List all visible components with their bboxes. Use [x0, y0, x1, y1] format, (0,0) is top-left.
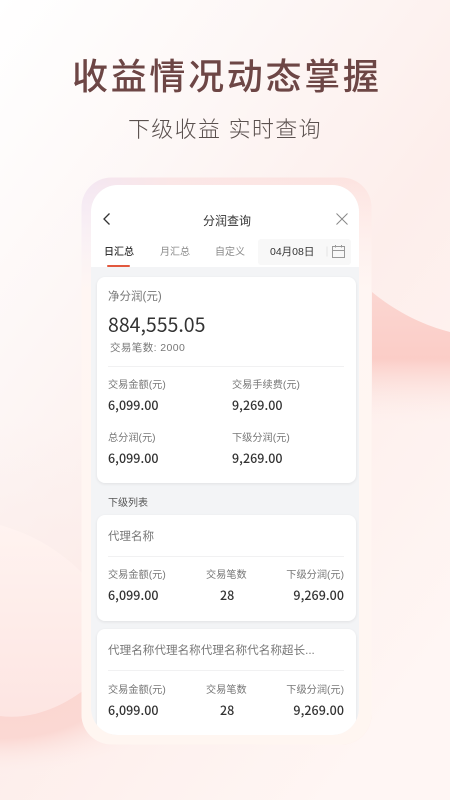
column: sub-agent profit: 下级分润(元) [286, 570, 344, 580]
icon: calendar [326, 245, 345, 258]
icon: close [336, 213, 348, 225]
column: amount: 交易金额(元) [108, 570, 166, 580]
metric: fee: 交易手续费(元) [232, 380, 300, 390]
agent card 1 [97, 515, 356, 621]
column: count: 交易笔数 [206, 684, 247, 696]
tab: monthly: 月汇总 [160, 247, 190, 258]
column: sub-agent profit: 9,269.00 [293, 585, 344, 604]
metric: sub-agent profit: 9,269.00 [232, 448, 283, 467]
net profit label: 净分润(元) [108, 291, 162, 303]
phone screen [91, 185, 359, 735]
metric: sub-agent profit [232, 432, 290, 467]
metric: sub-agent profit: 下级分润(元) [232, 432, 290, 444]
column: amount: 6,099.00 [108, 585, 159, 604]
column: amount [108, 684, 166, 719]
icon: back arrow [103, 213, 110, 225]
column: sub-agent profit: 9,269.00 [293, 700, 344, 719]
tab: custom: 自定义 [215, 247, 245, 258]
section heading: 下级列表 [108, 498, 148, 509]
page title: 分润查询 [203, 214, 251, 228]
summary card [97, 277, 356, 483]
column: sub-agent profit [286, 684, 344, 719]
metric: transaction amount: 6,099.00 [108, 395, 159, 414]
tab: daily: 日汇总 [104, 247, 134, 258]
transaction count: 交易笔数: 2000 [110, 342, 185, 354]
column: count [206, 684, 247, 719]
subtitle: 下级收益 实时查询 [128, 117, 322, 142]
title: 收益情况动态掌握 [72, 56, 382, 97]
column: count: 交易笔数 [206, 570, 247, 580]
column: amount [108, 569, 166, 604]
metric: fee [232, 379, 300, 414]
agent name: 代理名称 [108, 531, 154, 543]
screen header [91, 185, 359, 267]
metric: total profit: 总分润(元) [108, 432, 156, 444]
column: amount: 6,099.00 [108, 700, 159, 719]
metric: total profit: 6,099.00 [108, 448, 159, 467]
column: sub-agent profit: 下级分润(元) [286, 684, 344, 696]
date text: 04月08日 [270, 246, 314, 258]
tab underline [107, 265, 130, 267]
phone frame [82, 178, 370, 744]
agent card 2 [97, 629, 356, 735]
net profit value: 884,555.05 [108, 309, 205, 338]
metric: transaction amount [108, 379, 166, 414]
column: count [206, 569, 247, 604]
metric: total profit [108, 432, 159, 467]
column: sub-agent profit [286, 569, 344, 604]
metric: transaction amount: 交易金额(元) [108, 380, 166, 390]
metric: fee: 9,269.00 [232, 395, 283, 414]
long agent name: 代理名称代理名称代理名称代名称超长... [108, 644, 315, 657]
column: amount: 交易金额(元) [108, 684, 166, 696]
column: count: 28 [220, 585, 234, 604]
column: count: 28 [220, 700, 234, 719]
date picker [258, 239, 351, 265]
phone mockup [82, 178, 370, 744]
